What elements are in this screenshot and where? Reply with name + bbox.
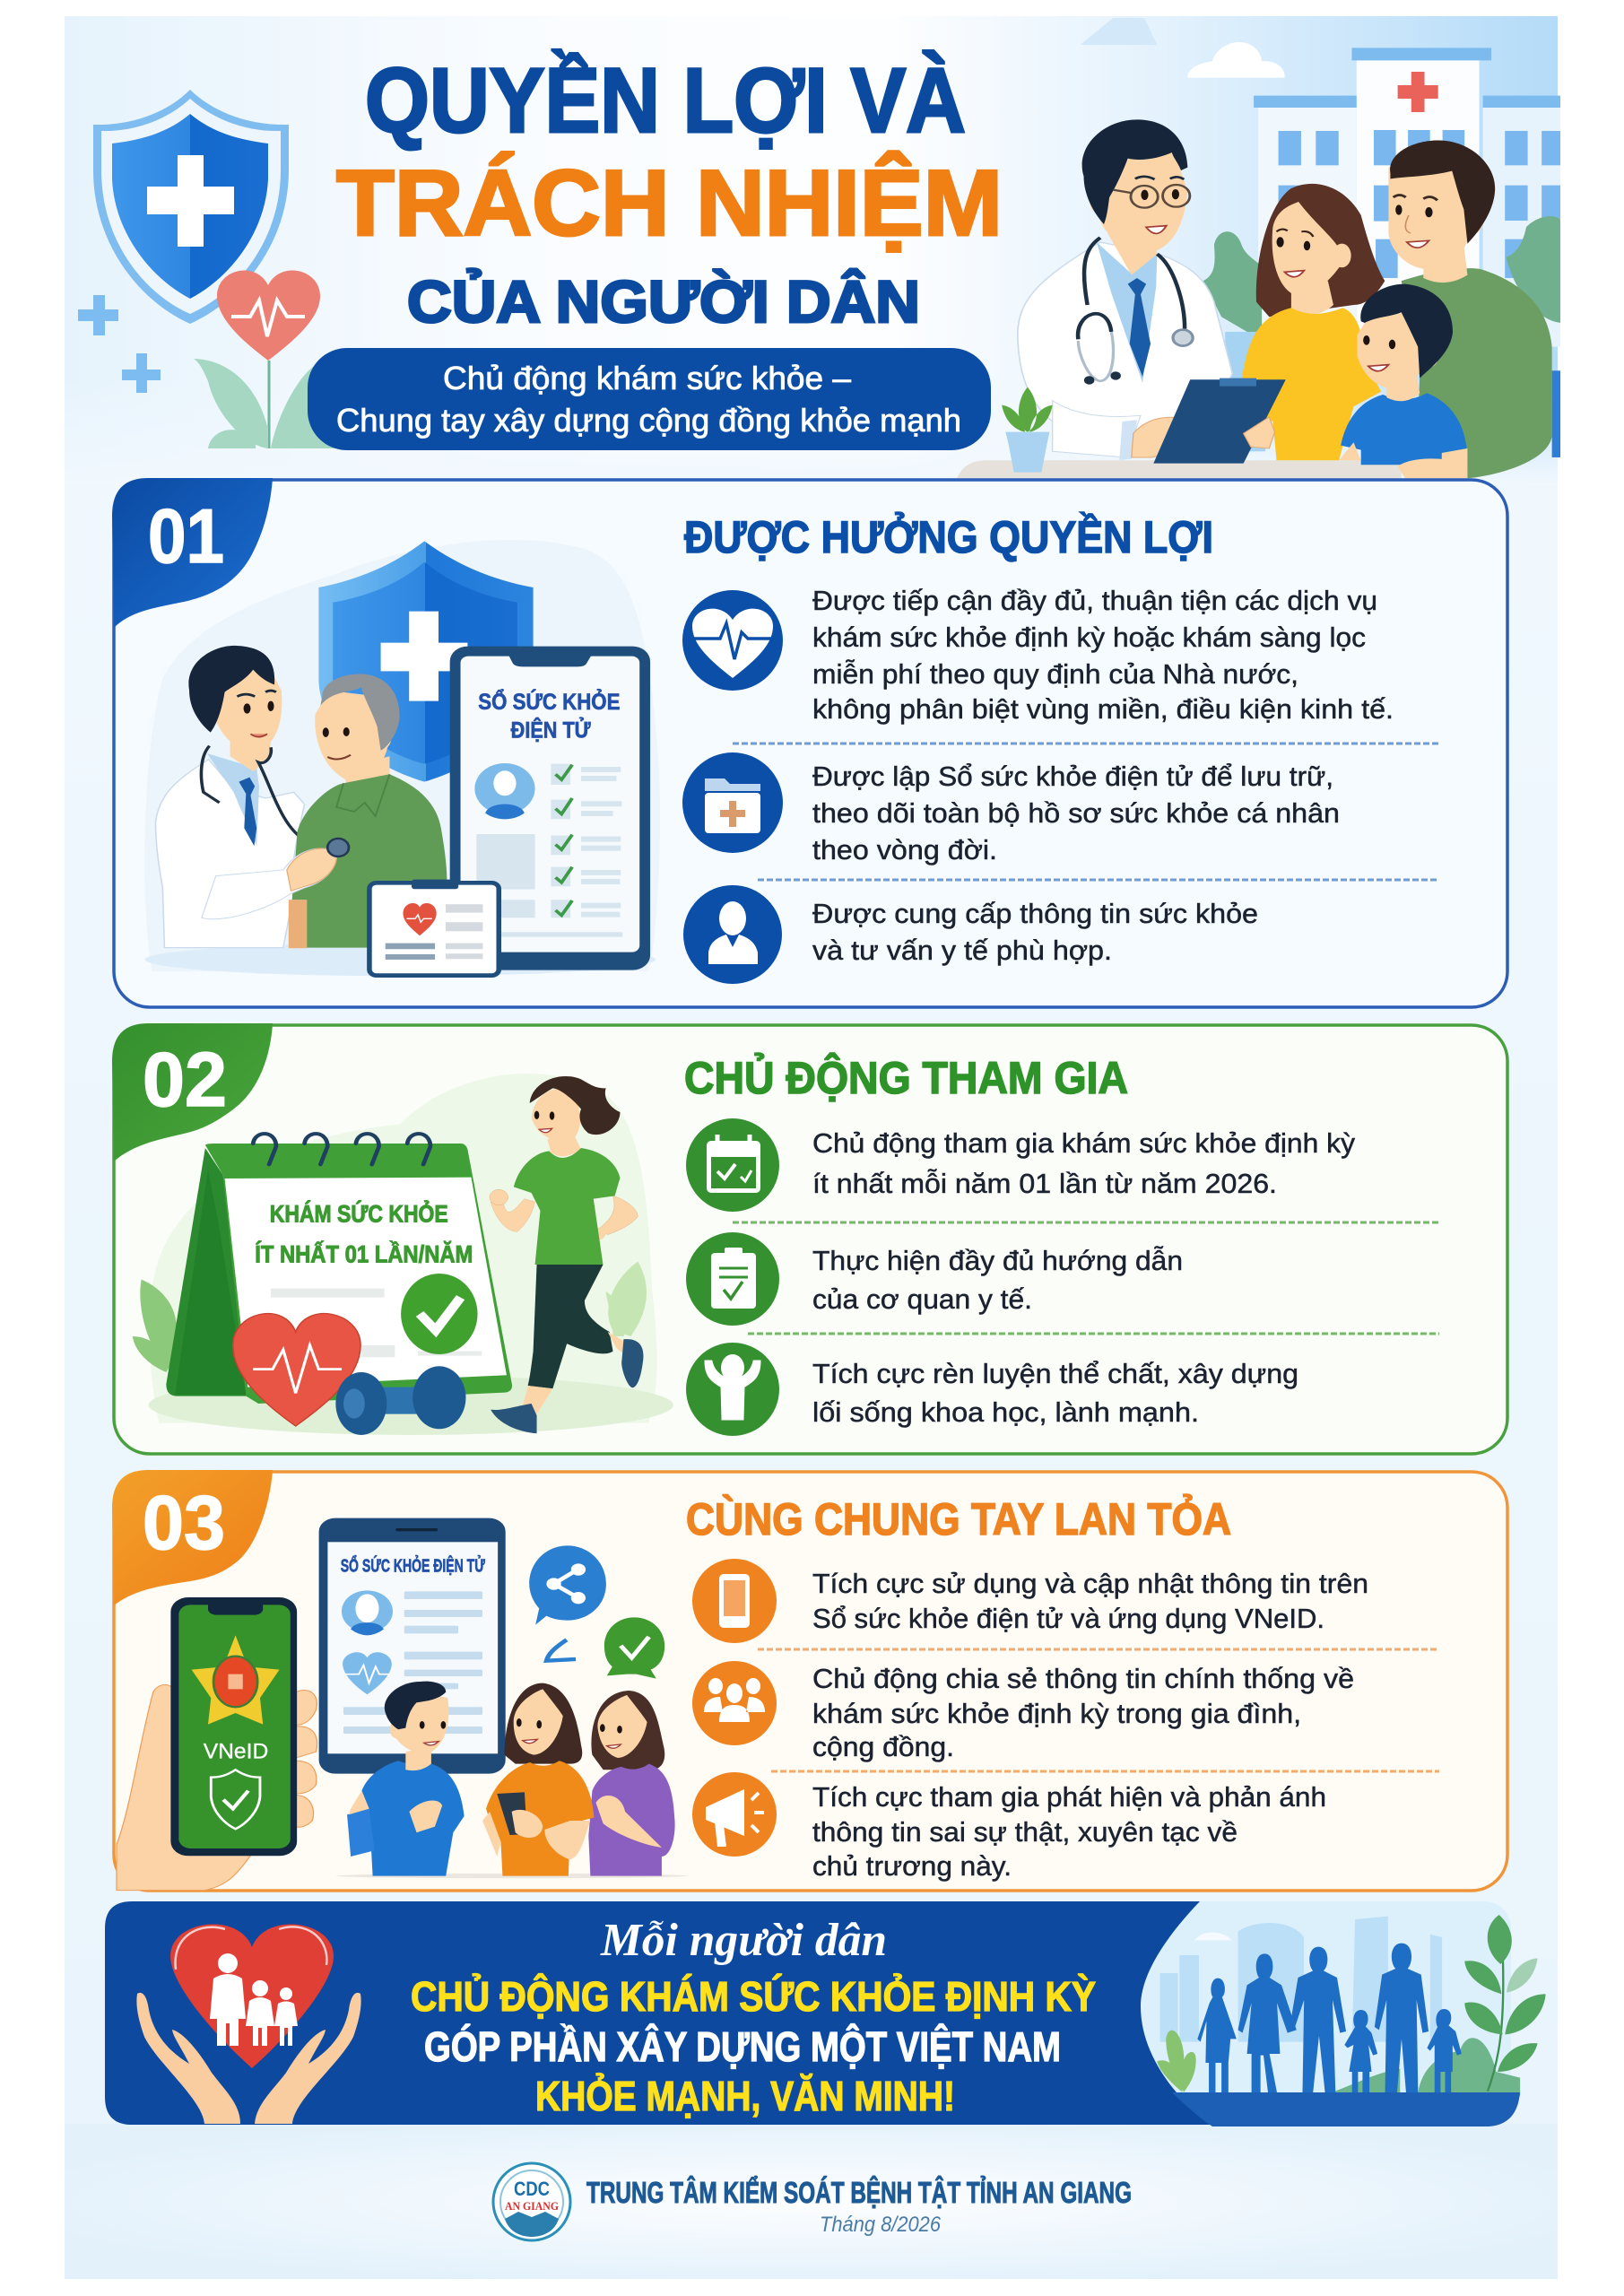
- illustration: calendar and runner: KHÁM SỨC KHỎE: [270, 1200, 448, 1228]
- text block 1: không phân biệt vùng miền, điều kiện kinh tế.: [812, 693, 1394, 725]
- text block 2: Được lập Sổ sức khỏe điện tử để lưu trữ,: [812, 761, 1333, 792]
- illustration: VNeID phone, tablet and people: SỔ SỨC KHỎE ĐIỆN TỬ: [341, 1553, 485, 1576]
- scene: family silhouettes: [1132, 1901, 1546, 2125]
- number tab 03: [112, 1470, 273, 1605]
- hand: [202, 848, 336, 919]
- text block 2: theo dõi toàn bộ hồ sơ sức khỏe cá nhân: [812, 797, 1340, 829]
- text block 7: [812, 1568, 1368, 1634]
- subtitle pill: Chung tay xây dựng cộng đồng khỏe mạnh: [336, 402, 961, 439]
- illustration: calendar and runner: [133, 1074, 673, 1435]
- plant: [1002, 387, 1053, 432]
- panel 1: rights: [112, 478, 1507, 1007]
- heading: CÙNG CHUNG TAY LAN TỎA: [686, 1493, 1231, 1544]
- closing text: GÓP PHẦN XÂY DỰNG MỘT VIỆT NAM: [424, 2023, 1061, 2070]
- illustration: VNeID phone, tablet and people: [117, 1518, 687, 1891]
- icon: calendar check: [686, 1118, 779, 1212]
- panel 3: spreading: [112, 1470, 1507, 1891]
- text block 4: ít nhất mỗi năm 01 lần từ năm 2026.: [812, 1168, 1277, 1199]
- orange: [504, 1683, 582, 1764]
- icon: person: [683, 885, 782, 984]
- text block 5: của cơ quan y tế.: [812, 1283, 1032, 1315]
- icon: medical folder: [682, 752, 783, 853]
- tablet: [319, 1518, 506, 1774]
- ground: [336, 1874, 687, 1878]
- title: CỦA NGƯỜI DÂN: [407, 268, 920, 335]
- closing banner: [105, 1901, 1546, 2126]
- purple: [591, 1691, 664, 1770]
- icon: heart flower: [193, 270, 350, 448]
- text block 1: khám sức khỏe định kỳ hoặc khám sàng lọc: [812, 622, 1366, 653]
- illustration: doctor, patient, health book: SỔ SỨC KHỎE: [478, 688, 620, 714]
- text block 8: khám sức khỏe định kỳ trong gia đình,: [812, 1698, 1301, 1729]
- header background: [65, 16, 1558, 484]
- text block 3: [812, 898, 1258, 966]
- text block 6: lối sống khoa học, lành mạnh.: [812, 1396, 1199, 1428]
- table: [957, 460, 1402, 478]
- runner: [528, 1265, 613, 1388]
- panel 2: participation: [112, 1023, 1507, 1454]
- patient: [343, 756, 389, 789]
- footer background: [65, 2124, 1558, 2279]
- icon: smartphone: [692, 1559, 777, 1643]
- footer logo: [493, 2163, 570, 2240]
- text block 4: Chủ động tham gia khám sức khỏe định kỳ: [812, 1127, 1355, 1159]
- text block 4: [812, 1127, 1355, 1199]
- icon: heart pulse: [682, 590, 783, 691]
- title: QUYỀN LỢI VÀ: [365, 49, 966, 152]
- icon: raised arms person: [686, 1343, 779, 1436]
- footer logo: CDC: [514, 2178, 550, 2200]
- footer organisation text: TRUNG TÂM KIỂM SOÁT BỆNH TẬT TỈNH AN GIANG: [586, 2176, 1132, 2209]
- text block 5: Thực hiện đầy đủ hướng dẫn: [812, 1245, 1183, 1276]
- dumbbell: [379, 1387, 425, 1414]
- text block 7: Tích cực sử dụng và cập nhật thông tin trên: [812, 1568, 1368, 1599]
- heart: [233, 1314, 360, 1426]
- father: [1402, 268, 1552, 478]
- text block 1: Được tiếp cận đầy đủ, thuận tiện các dịch vụ: [812, 585, 1377, 616]
- illustration: calendar and runner: ÍT NHẤT 01 LẦN/NĂM: [255, 1240, 473, 1268]
- icon: megaphone: [692, 1772, 777, 1857]
- closing text: CHỦ ĐỘNG KHÁM SỨC KHỎE ĐỊNH KỲ: [411, 1973, 1096, 2020]
- son: [1341, 393, 1467, 465]
- text block 5: [812, 1245, 1183, 1315]
- number tab 01: [112, 478, 273, 628]
- title: TRÁCH NHIỆM: [336, 152, 1003, 256]
- hand: [117, 1684, 252, 1891]
- doctor: [155, 760, 305, 948]
- text block 7: Sổ sức khỏe điện tử và ứng dụng VNeID.: [812, 1603, 1324, 1634]
- number tab 02: 02: [143, 1038, 227, 1123]
- illustration: doctor and family at hospital: [957, 18, 1560, 478]
- subtitle pill: Chủ động khám sức khỏe –: [443, 360, 851, 396]
- text block 6: [812, 1358, 1298, 1428]
- icon: small blue crosses: [78, 295, 161, 393]
- phone: [450, 647, 650, 970]
- text block 8: [812, 1663, 1354, 1762]
- text block 2: [812, 761, 1340, 865]
- doctor: [1018, 242, 1232, 455]
- illustration: doctor, patient, health book: [144, 540, 660, 976]
- footer organisation text: [586, 2176, 1132, 2237]
- heading: ĐƯỢC HƯỞNG QUYỀN LỢI: [684, 511, 1213, 562]
- closing text: [411, 1915, 1096, 2119]
- text block 9: Tích cực tham gia phát hiện và phản ánh: [812, 1781, 1326, 1813]
- clipboard: [1153, 379, 1286, 464]
- VNeID phone: [170, 1597, 297, 1856]
- text block 3: Được cung cấp thông tin sức khỏe: [812, 898, 1258, 929]
- text block 9: [812, 1781, 1326, 1882]
- text block 8: cộng đồng.: [812, 1731, 954, 1762]
- icon: clipboard check: [686, 1232, 779, 1326]
- icon: group of people: [692, 1661, 777, 1745]
- footer logo: AN GIANG: [505, 2199, 559, 2213]
- footer organisation text: Tháng 8/2026: [820, 2213, 942, 2237]
- blue: [361, 1761, 465, 1876]
- number tab 03: 03: [143, 1481, 225, 1566]
- share bubble: [529, 1545, 606, 1625]
- text block 6: Tích cực rèn luyện thể chất, xây dựng: [812, 1358, 1298, 1389]
- icon: header shield: [93, 90, 289, 324]
- text block 1: [812, 585, 1394, 725]
- closing text: Mỗi người dân: [600, 1915, 887, 1966]
- illustration: doctor, patient, health book: ĐIỆN TỬ: [511, 717, 591, 743]
- illustration: VNeID phone, tablet and people: VNeID: [204, 1739, 268, 1763]
- text block 3: và tư vấn y tế phù hợp.: [812, 935, 1112, 966]
- text block 2: theo vòng đời.: [812, 834, 997, 865]
- mother: [1256, 184, 1385, 317]
- text block 9: thông tin sai sự thật, xuyên tạc về: [812, 1816, 1238, 1848]
- closing text: KHỎE MẠNH, VĂN MINH!: [535, 2073, 955, 2119]
- number tab 01: 01: [148, 494, 224, 579]
- icon: heart in hands: [136, 1925, 361, 2124]
- small clipboard: [369, 883, 499, 976]
- subtitle pill: [308, 348, 991, 450]
- text block 9: chủ trương này.: [812, 1850, 1012, 1882]
- text block 1: miễn phí theo quy định của Nhà nước,: [812, 658, 1298, 690]
- heading: CHỦ ĐỘNG THAM GIA: [684, 1052, 1128, 1103]
- check bubble: [604, 1617, 664, 1679]
- title: [336, 49, 1003, 335]
- text block 8: Chủ động chia sẻ thông tin chính thống về: [812, 1663, 1354, 1694]
- number tab 02: [112, 1023, 273, 1161]
